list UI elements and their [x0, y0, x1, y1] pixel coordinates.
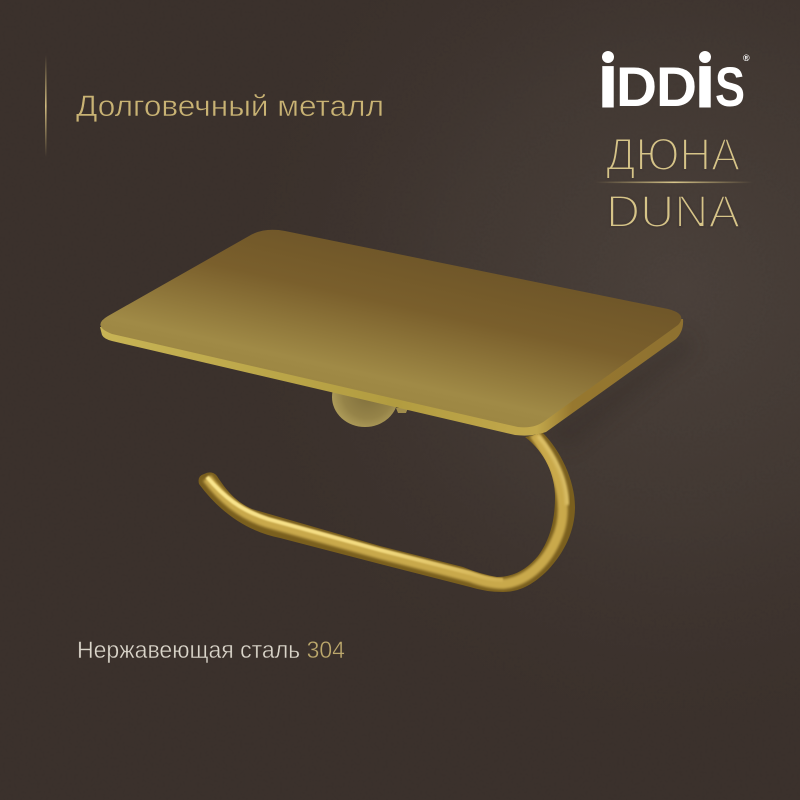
- logo: IDDIS: D: [656, 55, 697, 118]
- divider between series names: [595, 182, 753, 183]
- logo: IDDIS: I: [600, 55, 616, 118]
- series name: Дюна: ДЮНА: [606, 129, 740, 180]
- heading: durable metal: Долговечный металл: [76, 90, 384, 123]
- wall mount disc: [332, 367, 408, 427]
- decorative vertical accent line: [45, 55, 47, 157]
- logo: IDDIS: D: [616, 55, 657, 118]
- curved rod: [199, 433, 575, 592]
- caption: stainless steel 304: Нержавеющая сталь 304: [77, 637, 345, 664]
- shelf front edge: [100, 319, 683, 436]
- logo: IDDIS: [600, 51, 750, 118]
- logo: IDDIS: S: [715, 55, 745, 118]
- wall shadow under shelf: [540, 332, 695, 450]
- shelf top face: [100, 230, 681, 427]
- logo: IDDIS: ®: [743, 53, 750, 63]
- logo: IDDIS: I: [697, 55, 713, 118]
- product: toilet paper holder with shelf: [100, 230, 695, 592]
- series name: Duna: DUNA: [606, 186, 740, 237]
